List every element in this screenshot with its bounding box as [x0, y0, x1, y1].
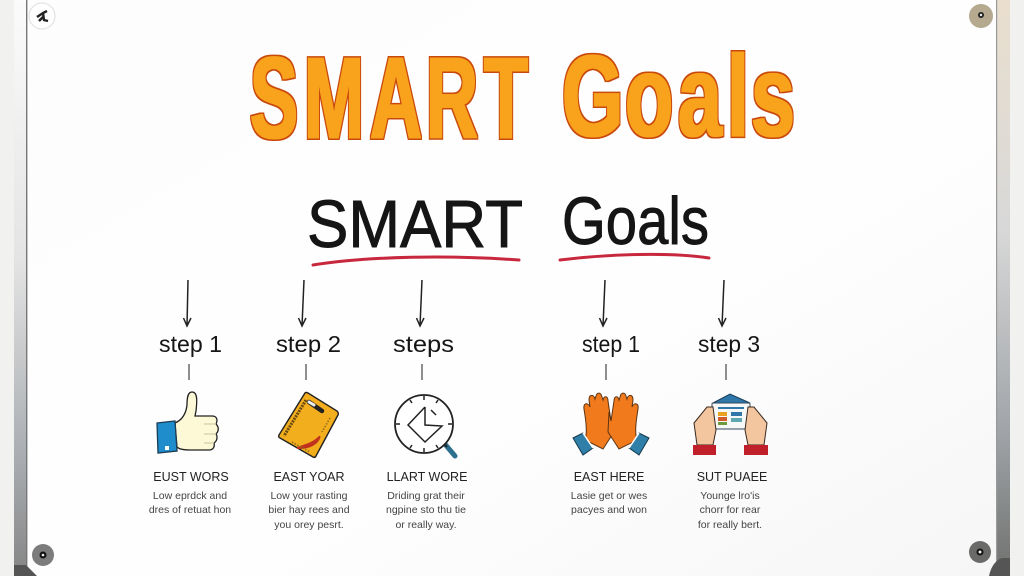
column 2: arrow and step: step 2	[276, 331, 341, 357]
column 2 text: you orey pesrt.	[274, 519, 344, 531]
column 1 text: Low eprdck and	[153, 490, 227, 502]
column 3 text: or really way.	[395, 519, 457, 531]
column 5 text: for really bert.	[698, 519, 762, 531]
column 5 text: SUT PUAEE	[697, 470, 767, 484]
column 5 text: chorr for rear	[700, 504, 761, 516]
column 2: arrow and step	[276, 280, 341, 380]
column 5 text	[697, 470, 767, 531]
column 3 text: LLART WORE	[387, 470, 467, 484]
column 4: arrow and step	[582, 280, 640, 380]
icon: clock with magnifier	[395, 395, 455, 456]
column 2 text	[268, 470, 350, 531]
red underlines	[313, 254, 709, 265]
title	[250, 32, 795, 163]
icon: raised orange gloves	[573, 393, 649, 455]
subtitle: SMART	[307, 187, 523, 262]
title: Goals	[562, 32, 795, 162]
icon: hands holding chart	[693, 394, 768, 455]
column 4 text: pacyes and won	[571, 504, 647, 516]
column 4 text: Lasie get or wes	[571, 490, 647, 502]
screw: top left	[29, 3, 55, 29]
column 4: arrow and step: step 1	[582, 331, 640, 357]
column 1: arrow and step: step 1	[159, 331, 222, 357]
column 2 text: Low your rasting	[270, 490, 348, 502]
column 2 text: bier hay rees and	[268, 504, 350, 516]
column 5: arrow and step	[698, 280, 760, 380]
column 5 text: Younge lro'is	[700, 490, 760, 502]
column 3 text: Driding grat their	[387, 490, 465, 502]
title: SMART	[250, 35, 528, 163]
column 3 text: ngpine sto thu tie	[386, 504, 466, 516]
column 1 text: dres of retuat hon	[149, 504, 231, 516]
screw: bottom right	[969, 541, 991, 563]
column 4 text: EAST HERE	[574, 470, 644, 484]
subtitle	[307, 184, 709, 262]
screw: bottom left	[32, 544, 54, 566]
column 3 text	[386, 470, 467, 531]
column 1 text	[149, 470, 231, 516]
column 1 text: EUST WORS	[153, 470, 229, 484]
column 4 text	[571, 470, 647, 516]
screw: top right	[969, 4, 993, 28]
icon: yellow card	[279, 392, 338, 457]
column 1: arrow and step	[159, 280, 222, 380]
column 5: arrow and step: step 3	[698, 331, 760, 357]
column 3: arrow and step: steps	[393, 331, 454, 357]
column 3: arrow and step	[393, 280, 454, 380]
column 2 text: EAST YOAR	[273, 470, 345, 484]
icon: thumbs up	[157, 392, 218, 453]
subtitle: Goals	[562, 184, 709, 259]
